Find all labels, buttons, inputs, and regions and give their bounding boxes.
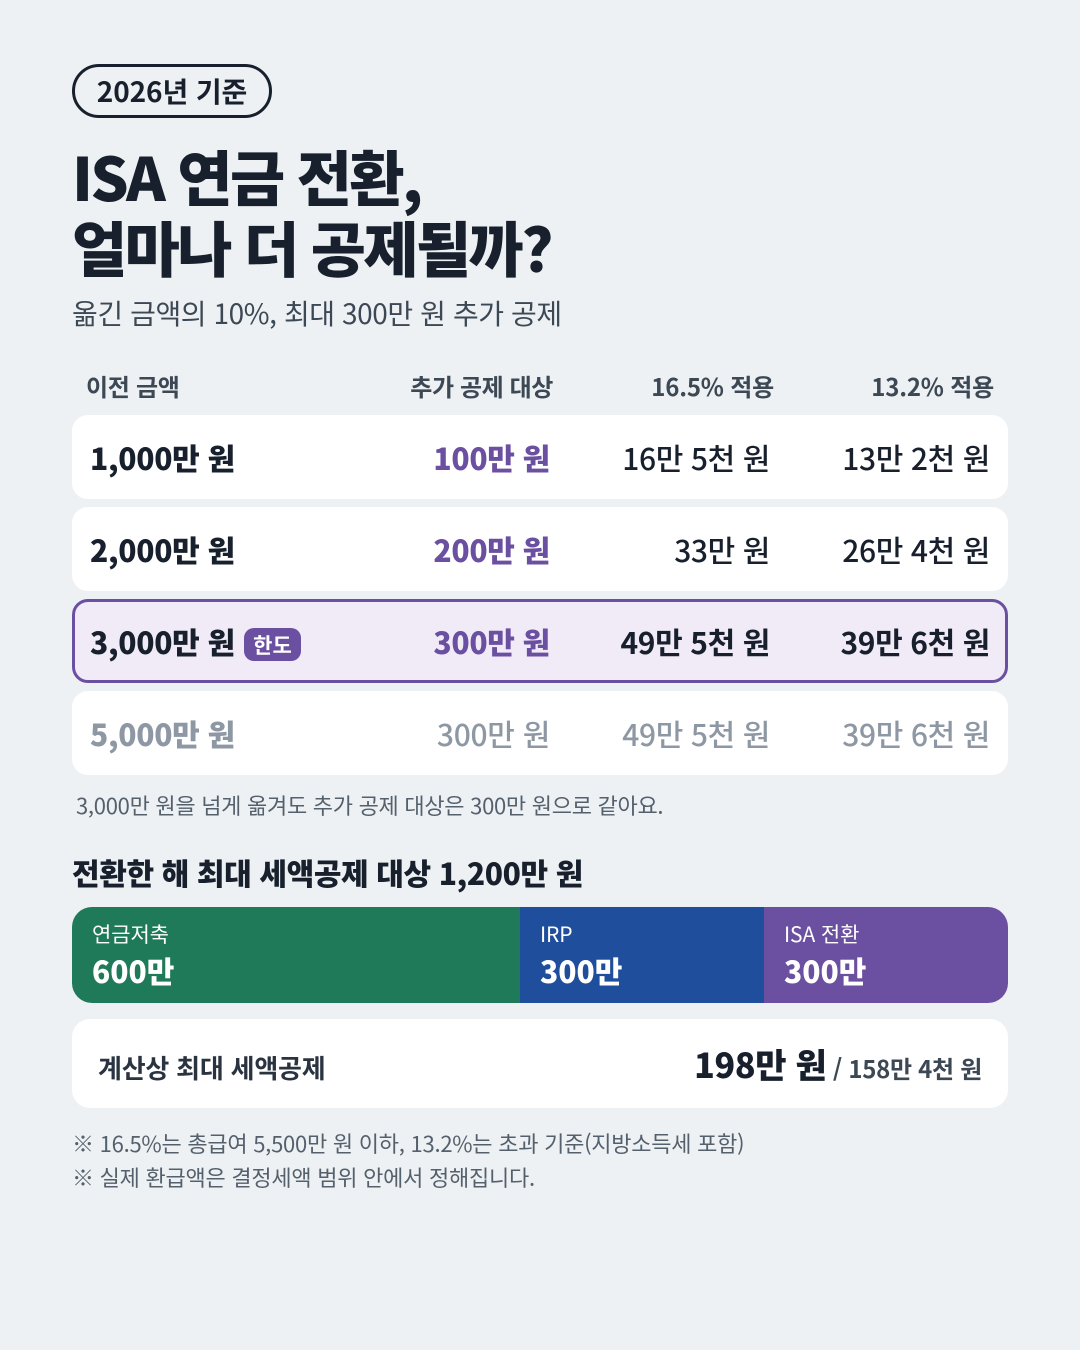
segment: pension savings: 600만 <box>92 948 174 992</box>
table row: 3,000만 원 highlighted: 39만 6천 원 <box>840 619 990 663</box>
title: ISA 연금 전환, <box>72 132 421 219</box>
table row: 2,000만 원: 200만 원 <box>433 527 550 571</box>
segment: IRP: 300만 <box>540 948 622 992</box>
footnotes: ※ 16.5%는 총급여 5,500만 원 이하, 13.2%는 초과 기준(지방소득세 포함) <box>72 1127 744 1159</box>
table header: 16.5% 적용 <box>651 368 774 403</box>
segment: ISA conversion: ISA 전환 <box>784 919 859 949</box>
title <box>72 132 551 290</box>
table row: 1,000만 원: 13만 2천 원 <box>842 435 990 479</box>
tag: limit: 한도 <box>253 630 292 660</box>
segment: pension savings: 연금저축 <box>92 919 169 949</box>
result panel <box>72 1019 1008 1108</box>
table header: 추가 공제 대상 <box>410 368 553 403</box>
table row: 1,000만 원: 1,000만 원 <box>90 435 235 479</box>
table row: 2,000만 원: 26만 4천 원 <box>842 527 990 571</box>
segment: IRP <box>520 907 764 1003</box>
segment: pension savings <box>72 907 520 1003</box>
table row: 5,000만 원 muted: 39만 6천 원 <box>842 711 990 755</box>
badge: 2026 basis <box>72 64 272 118</box>
tag: limit <box>244 628 301 661</box>
table row: 3,000만 원 highlighted: 3,000만 원 <box>90 619 235 663</box>
subtitle: 옮긴 금액의 10%, 최대 300만 원 추가 공제 <box>72 293 562 333</box>
stacked bar: deduction composition <box>72 907 1008 1003</box>
title: 얼마나 더 공제될까? <box>72 203 551 290</box>
table row: 1,000만 원: 100만 원 <box>433 435 550 479</box>
table header: 이전 금액 <box>86 368 180 403</box>
table row: 5,000만 원 muted <box>72 691 1008 775</box>
footnotes: ※ 실제 환급액은 결정세액 범위 안에서 정해집니다. <box>72 1160 535 1192</box>
segment: IRP: IRP <box>540 919 572 949</box>
badge: 2026 basis: 2026년 기준 <box>97 71 247 111</box>
table header: 13.2% 적용 <box>871 368 994 403</box>
result value: 198만 원 / 158만 4천 원 <box>694 1039 982 1088</box>
footnotes <box>72 1127 744 1192</box>
table row: 2,000만 원: 2,000만 원 <box>90 527 235 571</box>
table row: 1,000만 원: 16만 5천 원 <box>622 435 770 479</box>
table row: 2,000만 원: 33만 원 <box>674 527 770 571</box>
table row: 5,000만 원 muted: 49만 5천 원 <box>622 711 770 755</box>
table note: 3,000만 원을 넘게 옮겨도 추가 공제 대상은 300만 원으로 같아요. <box>76 789 663 821</box>
table header <box>86 368 994 403</box>
table row: 2,000만 원 <box>72 507 1008 591</box>
result label: 계산상 최대 세액공제 <box>98 1049 325 1086</box>
table row: 5,000만 원 muted: 5,000만 원 <box>90 711 235 755</box>
table row: 3,000만 원 highlighted: 49만 5천 원 <box>620 619 770 663</box>
segment: ISA conversion: 300만 <box>784 948 866 992</box>
table row: 3,000만 원 highlighted: 300만 원 <box>433 619 550 663</box>
segment: ISA conversion <box>764 907 1008 1003</box>
table row: 3,000만 원 highlighted <box>72 599 1008 683</box>
table row: 5,000만 원 muted: 300만 원 <box>437 711 550 755</box>
table row: 1,000만 원 <box>72 415 1008 499</box>
section heading: 전환한 해 최대 세액공제 대상 1,200만 원 <box>72 850 583 894</box>
